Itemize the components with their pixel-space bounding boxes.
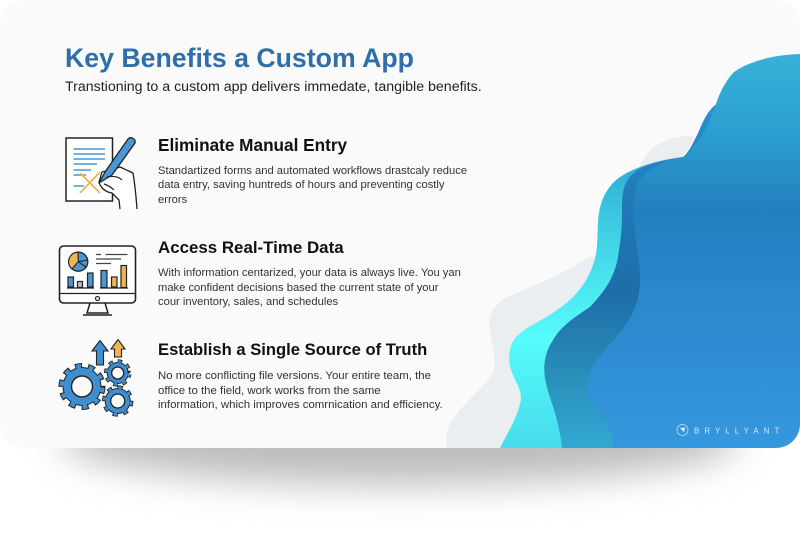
logo: bryllyant: BRYLLYANT xyxy=(694,426,784,436)
heading: eliminate manual entry: Eliminate Manual Entry xyxy=(158,135,347,155)
card panel with waves xyxy=(58,54,800,448)
text: eliminate manual entry: data entry, saving huntreds of hours and preventing costly xyxy=(158,179,444,191)
text: access real-time data: cour inventory, sales, and schedules xyxy=(158,296,338,308)
heading: establish a single source of truth: Establish a Single Source of Truth xyxy=(158,340,427,359)
heading: access real-time data: Access Real-Time Data xyxy=(158,238,344,257)
wave: dark blue layer xyxy=(544,105,716,448)
text: eliminate manual entry: errors xyxy=(158,194,187,206)
text: access real-time data xyxy=(158,267,461,308)
text: access real-time data: With information centarized, your data is always live. You yan xyxy=(158,267,461,279)
text: access real-time data: make confident decisions based the current state of your xyxy=(158,282,438,294)
text: establish a single source of truth: No more conflicting file versions. Your entire team, the xyxy=(158,370,431,382)
text: establish a single source of truth xyxy=(158,370,443,411)
icon: monitor dashboard xyxy=(58,245,136,316)
subtitle: Transtioning to a custom app delivers immedate, tangible benefits. xyxy=(65,78,482,94)
text: eliminate manual entry: Standartized forms and automated workflows drastcaly reduce xyxy=(158,164,467,176)
wave: main blue layer xyxy=(587,54,800,448)
wave: grey back shape xyxy=(446,136,700,448)
icon: gears and arrows xyxy=(58,338,134,417)
title: Key Benefits a Custom App xyxy=(65,43,414,73)
text: establish a single source of truth: information, which improves comrnication and efficiency. xyxy=(158,399,443,411)
text: eliminate manual entry xyxy=(158,164,467,206)
wave: cyan layer xyxy=(500,157,682,448)
icon: document and pen xyxy=(65,137,138,210)
text: establish a single source of truth: office to the field, work works from the same xyxy=(158,384,381,396)
